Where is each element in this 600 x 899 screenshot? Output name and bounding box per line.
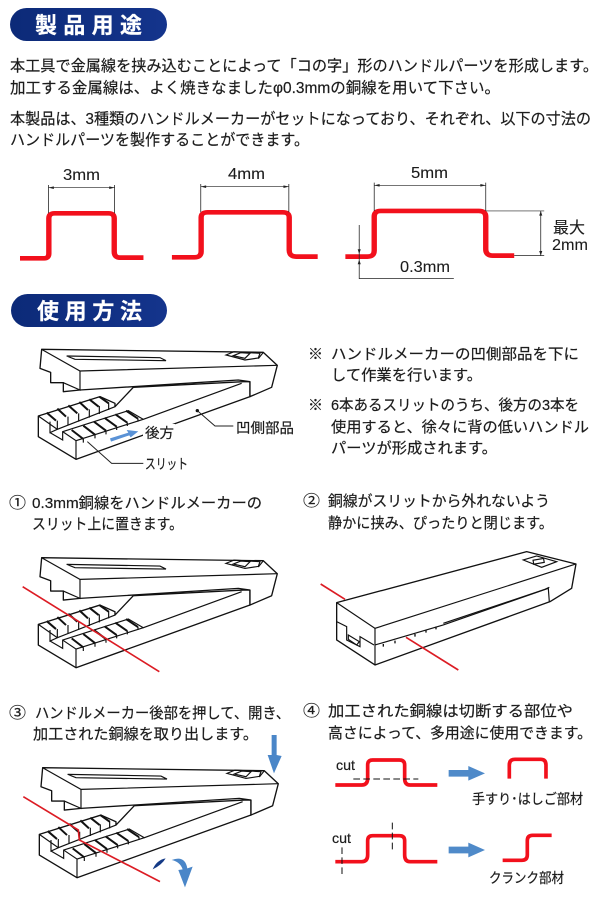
step 2 text: ② (303, 492, 320, 510)
illustration: removing processed wire (23, 735, 282, 887)
text block: product description: 本製品は、3種類のハンドルメーカーがセットになっており、それぞれ、以下の寸法の (10, 110, 591, 128)
text block: notes (308, 346, 589, 457)
text block: notes: ※ (308, 346, 323, 363)
text block: notes: ※ (308, 397, 323, 414)
step 3 text: 加工された銅線を取り出します。 (33, 726, 258, 743)
step 4 text: 加工された銅線は切断する部位や (328, 703, 573, 720)
diagram: 5mm handle with height and wire dimensions: 最大 (553, 219, 585, 237)
step 1 text: 0.3mm銅線をハンドルメーカーの (32, 495, 262, 512)
illustration: open handle maker with labels: 凹側部品 (236, 420, 294, 436)
step 3 text: ③ (9, 704, 26, 722)
text block: notes: ハンドルメーカーの凹側部品を下に (331, 346, 579, 363)
illustration: open handle maker with labels: スリット (145, 456, 188, 472)
text block: product description: ハンドルパーツを製作することができます。 (10, 131, 309, 149)
illustration: open handle maker with labels: 後方 (145, 425, 174, 441)
diagram: cut for crank parts (332, 823, 564, 886)
diagram: cut for handrail and ladder parts (335, 757, 583, 807)
diagram: cut for handrail and ladder parts: cut (336, 757, 355, 773)
diagram: 5mm handle with height and wire dimensions: 5mm (411, 165, 448, 182)
heading: 製品用途 (10, 8, 167, 41)
heading: 製品用途: 製品用途 (35, 8, 142, 40)
step 4 text (303, 702, 592, 742)
diagram: cut for handrail and ladder parts: 手すり･はしご部材 (472, 791, 583, 807)
text block: notes: 使用すると、徐々に背の低いハンドル (331, 419, 589, 436)
text block: notes: パーツが形成されます。 (331, 440, 497, 457)
step 2 text (303, 492, 553, 532)
illustration: open handle maker with labels (38, 349, 294, 472)
text block: notes: 6本あるスリットのうち、後方の3本を (331, 397, 579, 414)
illustration: wire on slits (23, 558, 277, 672)
step 3 text (9, 704, 290, 743)
step 1 text: スリット上に置きます。 (32, 516, 183, 533)
step 1 text (9, 494, 262, 533)
heading: 使用方法: 使用方法 (37, 294, 142, 326)
step 3 text: ハンドルメーカー後部を押して、開き、 (35, 705, 290, 722)
diagram: 5mm handle with height and wire dimensions: 2mm (552, 237, 588, 254)
diagram: 5mm handle with height and wire dimensions: 0.3mm (400, 259, 450, 276)
heading: 使用方法 (11, 294, 167, 327)
step 2 text: 銅線がスリットから外れないよう (328, 493, 550, 510)
step 4 text: ④ (303, 702, 320, 720)
illustration: closed handle maker (321, 552, 576, 670)
text block: notes: して作業を行います。 (331, 367, 482, 384)
text block: product description: 加工する金属線は、よく焼きなましたφ0.3mmの銅線を用いて下さい。 (10, 79, 500, 97)
step 4 text: 高さによって、多用途に使用できます。 (328, 724, 592, 742)
diagram: 4mm handle (172, 166, 318, 257)
arrow: press down (268, 735, 282, 773)
text block: product description: 本工具で金属線を挟み込むことによって「コの字」形のハンドルパーツを形成します。 (10, 57, 598, 75)
diagram: 4mm handle: 4mm (228, 166, 265, 183)
step 1 text: ① (9, 494, 26, 512)
diagram: cut for crank parts: cut (332, 830, 351, 846)
diagram: cut for crank parts: クランク部材 (489, 870, 564, 886)
diagram: 3mm handle: 3mm (63, 167, 100, 184)
arrow: rotate open (153, 858, 193, 887)
diagram: 3mm handle (20, 167, 143, 258)
diagram: 5mm handle with height and wire dimensions (345, 165, 588, 279)
text block: product description (10, 57, 598, 149)
step 2 text: 静かに挟み、ぴったりと閉じます。 (328, 515, 553, 532)
